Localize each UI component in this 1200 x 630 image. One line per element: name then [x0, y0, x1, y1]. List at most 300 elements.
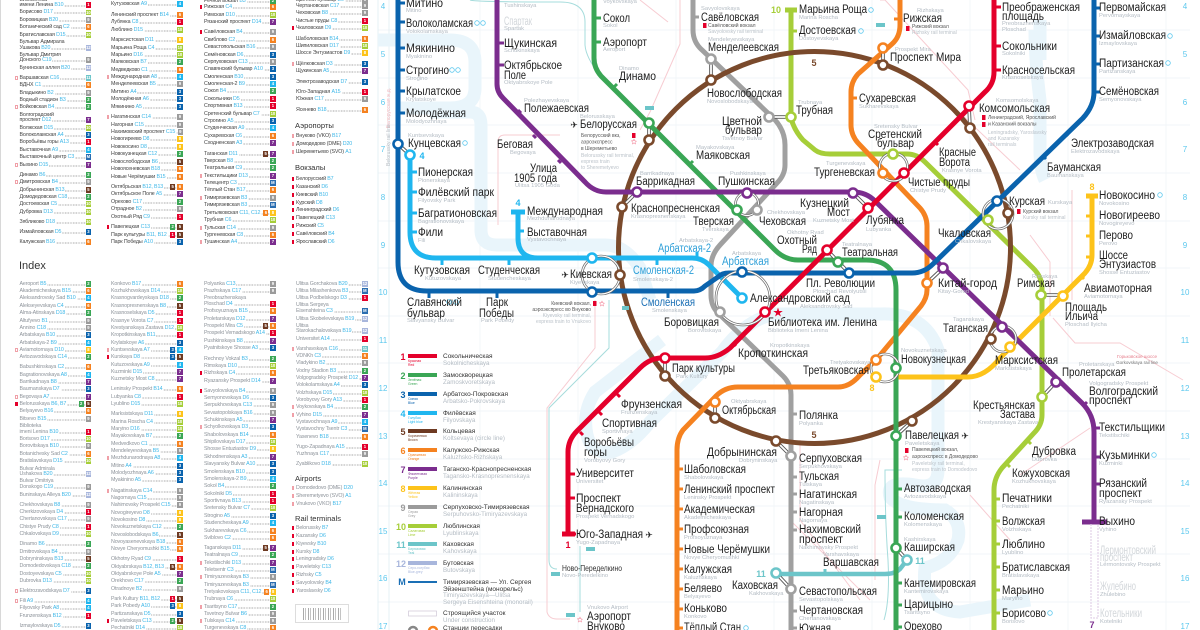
index column 3 Russian: 10 — [271, 217, 275, 222]
index column 3 Latin: Proletarskaya D12 — [204, 316, 245, 322]
index column 1 Russian: Измайловская D5 — [20, 228, 61, 234]
index column 2 Latin: 6 — [179, 539, 181, 544]
station labels west: Molodyozhnaya — [406, 119, 447, 125]
index column 3 Latin: 9 — [272, 410, 274, 415]
station labels north centre: аэроэкспресс — [581, 140, 613, 146]
legend row: line 12: 12 — [396, 559, 406, 569]
station labels south: Kakhovskaya — [749, 591, 784, 597]
station labels west: Студенческая — [478, 265, 540, 277]
index column 3 Latin — [200, 280, 276, 630]
index column 1 Russian: проспект D12 — [20, 116, 51, 122]
station labels north east: Римская — [1017, 278, 1055, 290]
station labels north east — [938, 2, 1166, 328]
station labels north centre: express train — [581, 159, 610, 165]
line 3 dark blue — [398, 0, 1094, 291]
station labels south east: проспект — [1099, 488, 1143, 500]
index column 1 Latin: Biblioteka — [20, 422, 41, 428]
index column 1 Latin: 2 — [87, 354, 90, 359]
line numbers: 5 — [811, 430, 817, 440]
index column 3 Latin: Sokol B4 — [204, 482, 224, 488]
index column 2 Russian: Мякинино A5 — [111, 104, 142, 110]
list: rail terminals: Yaroslavsky D6 — [296, 588, 331, 594]
station labels north centre: Проспект Мира — [890, 52, 962, 64]
index column 3 Russian: Савёловская B4 — [204, 28, 242, 34]
index column 4 Russian: Юго-Западная A15 — [296, 88, 340, 94]
index column 2 Russian: Октябрьская B12, B13 — [111, 184, 163, 190]
station labels centre: Ряд — [802, 244, 817, 256]
legend row: line 7 — [400, 465, 532, 480]
station labels centre: Арбатская-2 — [658, 243, 711, 255]
left page edge — [0, 0, 1, 630]
index column 2 Latin: Park Pobedy A10 — [111, 602, 150, 608]
index column 2 Latin: 10 — [178, 401, 182, 406]
station labels west: Филёвский парк — [418, 187, 495, 199]
index column 2 Latin: Oktyabrskaya B12, B13 — [111, 564, 164, 570]
station labels south east: Братиславская — [1002, 562, 1070, 574]
index column 3 Latin: 6 — [272, 432, 274, 437]
index column 3 Russian: Сокольники D5 — [204, 96, 240, 102]
index column 1 Russian: Донского C19 — [20, 56, 51, 62]
index column 2 Russian: Митино A4 — [111, 88, 136, 94]
airport express lines — [470, 0, 902, 620]
station labels north centre: Rizhskaya — [917, 8, 945, 14]
station labels north east: Baumanskaya — [1047, 173, 1085, 179]
grid numbers left: 8 — [381, 193, 386, 202]
service icons: ✈ — [645, 530, 653, 540]
index column 3 Russian: Текстильщики D13 — [204, 172, 248, 178]
station labels west: Победы — [479, 308, 514, 320]
index column 4 Russian: Шипиловская D17 — [296, 42, 339, 48]
station labels north east: Первомайская — [1099, 2, 1166, 14]
station labels west: Spartak — [504, 26, 524, 32]
station labels north east: Novogireyevo — [1099, 221, 1134, 227]
index column 1 Latin: 12 — [86, 492, 91, 497]
station labels west: Фили — [418, 227, 443, 239]
station labels south: Polyanka — [799, 421, 824, 427]
index column 4 Latin: М — [363, 288, 367, 293]
index column 3 Latin: Shosse Entuziastov D9 — [204, 446, 256, 452]
index column 2 Latin: 6 — [179, 441, 181, 446]
station labels south: Belyayevo — [684, 594, 711, 600]
index column 2 Russian: Охотный Ряд C9 — [111, 214, 150, 220]
index column 1 Russian: Боровицкая B20 — [20, 16, 58, 22]
station labels south: Коньково — [684, 603, 727, 615]
index column 2 Latin: Lyublino D15 — [111, 400, 140, 406]
station labels west: Щукинская — [504, 38, 557, 50]
index column 3 Latin: Preobrazhenskaya — [204, 294, 246, 300]
index column 1 Russian: Дмитровская B4 — [20, 178, 58, 184]
station labels north centre: Chekhovskaya — [767, 210, 806, 216]
index column 3 Russian: Рязанский проспект D14 — [204, 18, 261, 24]
index column 3 Latin: 9 — [272, 618, 274, 623]
index column 3 Latin: 5 — [265, 323, 267, 328]
index column 2 Latin: 3 — [179, 611, 181, 616]
index column 3 Russian: Семёновская D6 — [204, 52, 243, 58]
index column 4 Latin: Voykovskaya B4 — [296, 404, 333, 410]
heading: Index: Index — [19, 260, 46, 272]
station labels west: Pionerskaya — [418, 178, 451, 184]
station labels south east: Выхино — [1099, 516, 1135, 528]
index column 3 Latin: Trubnaya C6 — [204, 596, 233, 602]
station labels south east: Vyhino — [1099, 527, 1117, 533]
station labels north centre: Belorusskaya — [580, 114, 616, 120]
index column 4 Latin: Ulitsa Skobelevskaya B19 — [296, 316, 354, 322]
grid numbers right: 12 — [1181, 384, 1190, 393]
index column 3 Latin: 7 — [272, 417, 274, 422]
index column 3 Russian: Серпуховская C13 — [204, 58, 248, 64]
index column 3 Russian: Севастопольская B16 — [204, 44, 255, 50]
index column 4 Latin: 4 — [364, 419, 366, 424]
index column 3 Latin: 7 — [272, 316, 274, 321]
station labels north east: Авиамоторная — [1084, 283, 1152, 295]
station labels north centre: Tsvetnoy Bulvar — [722, 136, 763, 142]
service icons: ✈ — [961, 431, 969, 441]
index column 3 Russian: М — [271, 180, 275, 185]
station labels south east: Кожуховская — [1012, 468, 1070, 480]
station labels south: Serpukhovskaya — [799, 464, 843, 470]
legend row: line 5: Koltsevaya (circle line) — [443, 435, 505, 442]
station labels north east: Энтузиастов — [1099, 259, 1156, 271]
index column 2 Latin: 7 — [179, 571, 181, 576]
station labels north east: Измайловская — [1099, 30, 1166, 42]
station labels south east: Gorkovskaya rail line — [1116, 360, 1158, 365]
station labels west: Kutuzovskaya — [425, 276, 462, 282]
index column 1 Latin: Akademicheskaya B15 — [20, 288, 71, 294]
index column 4 Russian: 7 — [364, 68, 366, 73]
index column 1 Russian: 4 — [87, 147, 90, 152]
index column 3 Latin: 9 — [272, 611, 274, 616]
station labels north centre: Пушкинская — [718, 176, 775, 188]
index column 2 Latin: 1 — [179, 556, 181, 561]
heading: airports: Airports — [295, 474, 321, 483]
index column 2 Russian: 6 — [179, 174, 181, 179]
index column 1 Russian: 10 — [86, 10, 91, 15]
grid numbers left: 6 — [381, 98, 386, 107]
station labels south east: Коломенская — [904, 511, 964, 523]
index column 3 Latin: Prospekt Vernadskogo A14 — [204, 330, 265, 336]
index column 3 Russian: 10 — [271, 12, 275, 17]
station labels north east: Partizanskaya — [1099, 69, 1136, 75]
index column 3 Latin: 7 — [272, 545, 274, 550]
grid numbers right — [1181, 2, 1190, 630]
legend row: line 4: Light blue — [408, 420, 423, 424]
index column 1 Latin: 2 — [87, 563, 90, 568]
index column 1 Latin: Donskogo C19 — [20, 484, 53, 490]
index column 1 Russian: 3 — [87, 132, 90, 137]
grid numbers left: 4 — [381, 2, 386, 11]
station labels north east: Электрозаводская — [1071, 138, 1154, 150]
station labels south: Universitet — [576, 479, 604, 485]
station labels west: Молодёжная — [406, 108, 466, 120]
list: rail terminals: Savyolovsky B4 — [296, 580, 332, 586]
legend row: line 3 — [400, 390, 508, 405]
index column 1 Latin: 9 — [87, 484, 90, 489]
index column 1 Latin: 5 — [87, 401, 90, 406]
station labels north east: Sokolniki — [1002, 51, 1025, 57]
index column 2 Latin: 7 — [179, 376, 181, 381]
index column 2 Latin: 1 — [179, 332, 181, 337]
index column 2 Latin: 6 — [179, 386, 181, 391]
station labels north centre: Sretensky Bulvar — [874, 124, 918, 130]
line numbers: 8 — [1089, 182, 1095, 192]
index column 2 Latin: 8 — [179, 603, 181, 608]
station labels north east: and Kazansky — [988, 136, 1020, 142]
station labels south east: Kolomenskaya — [904, 522, 943, 528]
station labels north centre: Достоевская — [799, 25, 856, 37]
legend row: line 3: 3 — [400, 390, 406, 400]
index column 4 Russian: Чеховская B8 — [296, 10, 328, 16]
index column 2 Latin: Konkovo B17 — [111, 280, 141, 286]
index column 2 Latin: 3 — [172, 603, 174, 608]
station labels north centre — [580, 0, 982, 233]
index column 2 Russian: Новоясеневская B18 — [111, 166, 160, 172]
index column 3 Russian: 1 — [272, 103, 274, 108]
grid numbers right: 9 — [1183, 241, 1188, 250]
legend row: monorail — [398, 577, 533, 606]
index column 1 Russian: М — [87, 154, 90, 159]
interchange rings — [582, 153, 1016, 382]
list: rail terminals Russian: Ярославский D6 — [296, 238, 334, 244]
station labels north east: rail terminals — [988, 142, 1017, 148]
index column 3 Russian: 1 — [272, 96, 274, 101]
index column 2 Latin: Krylatskoye A6 — [111, 340, 144, 346]
line 8 yellow — [896, 196, 1098, 377]
grid numbers right: 10 — [1181, 288, 1190, 297]
index column 2 Russian: Парк культуры B11, B12 — [111, 232, 167, 238]
station labels centre: Ploschad Revolyutsii — [813, 289, 866, 295]
station labels south: Нагатинская — [799, 489, 857, 501]
index column 2 Russian: 6 — [179, 184, 181, 189]
grid numbers right: 7 — [1183, 145, 1188, 154]
index column 1 Russian: Добрынинская B13 — [20, 186, 64, 192]
index column 4 Russian: Электрозаводская D7 — [296, 78, 347, 84]
station labels north east: Pervomayskaya — [1099, 13, 1141, 19]
station labels north centre: Рижская — [903, 13, 942, 25]
index column 1 Latin: 10 — [86, 571, 91, 576]
station labels south: Севастопольская — [799, 586, 877, 598]
index column 3 Latin: Rizhskaya C4 — [204, 370, 235, 376]
index column 4 Russian: Чертановская C17 — [296, 2, 339, 8]
station labels north centre: Trubnaya — [798, 100, 823, 106]
station labels south: Аэропорт — [587, 611, 632, 623]
station labels south: Chertanovskaya — [799, 616, 842, 622]
station labels north centre: Dostoyevskaya — [799, 36, 839, 42]
index column 2 Russian: Новогиреево D8 — [111, 136, 149, 142]
station labels north centre: Savyolovskaya — [701, 6, 740, 12]
station labels north centre: Чистые пруды — [908, 177, 970, 189]
station labels west: Myakinino — [406, 54, 432, 60]
legend row: line 12: Серо-голубая — [408, 566, 430, 570]
index column 1 Latin: Babushkinskaya C2 — [20, 364, 64, 370]
index column 2 Russian: 4 — [179, 74, 181, 79]
index column 2 Latin: 6 — [179, 546, 181, 551]
index column 2 Russian: 6 — [179, 67, 181, 72]
list: rail terminals: Leningradsky D6 — [296, 556, 334, 562]
index column 2 Russian: 9 — [179, 122, 181, 127]
station labels south east: Рязанский — [1099, 478, 1147, 490]
index column 1 Latin: Chertanovskaya C17 — [20, 516, 67, 522]
index column 1 Latin: 2 — [80, 401, 82, 406]
station labels south: Добрынинская — [707, 447, 777, 459]
index column 1 Latin: Altufyevo B1 — [20, 318, 48, 324]
station labels south: Dobryninskaya — [739, 458, 778, 464]
station labels south: Vorobyovy Gory — [584, 458, 625, 464]
station labels west: Октябрьское — [504, 60, 562, 72]
index column 2 Russian: 10 — [178, 45, 182, 50]
index column 1 Russian: 6 — [87, 24, 90, 29]
line numbers: 7 — [1089, 620, 1095, 630]
index column 2 Latin: Orekhovo C17 — [111, 578, 144, 584]
list: airports: Domodedovo (DME) D20 — [296, 484, 353, 490]
index column 3 Latin: 6 — [272, 528, 274, 533]
list: rail terminals: Belorussky B7 — [296, 524, 328, 530]
station labels south east: Kantemirovskaya — [904, 589, 949, 595]
index column 3 Russian: Тимирязевская B3 — [204, 194, 247, 200]
index column 1 Latin: 3 — [87, 588, 90, 593]
index column 2 Russian: 9 — [179, 114, 181, 119]
index column 2 Latin: 3 — [172, 347, 174, 352]
index column 2 Russian: Люблино D15 — [111, 26, 143, 32]
station labels centre: Proletarskaya — [1079, 362, 1115, 368]
station labels north east: Сокольники — [1002, 41, 1057, 53]
legend row: monorail: Тимирязевская — Ул. Сергея — [443, 579, 532, 586]
station labels west: Filyovsky Park — [418, 198, 455, 204]
index column 1 Latin: 10 — [86, 436, 91, 441]
station labels north east: Chkalovskaya — [955, 239, 992, 245]
station labels centre: Арбатская — [722, 256, 769, 268]
station labels north centre: бульвар — [725, 125, 762, 137]
index column 2 Russian: Международная A8 — [111, 74, 157, 80]
index column 3 Latin: 5 — [265, 545, 267, 550]
station labels west: Begovaya — [510, 150, 537, 156]
index column 3 Latin: 9 — [272, 388, 274, 393]
index column 2 Latin: Nagornaya C15 — [111, 494, 146, 500]
index column 1 Russian: 6 — [87, 239, 90, 244]
station labels centre: Мост — [827, 207, 851, 219]
legend row: line 2: Green — [408, 382, 418, 386]
index column 3 Russian: Телецентр C3 — [204, 180, 237, 186]
legend row: line 12: Blue-grey — [408, 570, 423, 574]
legend row: line 2 — [400, 371, 495, 386]
station labels centre: Парк культуры — [672, 363, 735, 375]
index column 3 Latin: 2 — [272, 483, 274, 488]
index column 2 Latin: 3 — [179, 340, 181, 345]
rail line captions: Белорусская ж.д. — [386, 88, 392, 128]
legend row: line 4: Голубая — [408, 416, 421, 420]
index column 1 Russian: Зябликово D18 — [20, 218, 55, 224]
line numbers: 4 — [419, 151, 425, 161]
index column 1 Latin: 4 — [87, 340, 90, 345]
index column 3 Russian: 3 — [272, 66, 274, 71]
list: rail terminals Russian — [292, 176, 340, 244]
station labels north east: Semyonovskaya — [1099, 97, 1142, 103]
list: rail terminals Russian: Белорусский B7 — [296, 176, 334, 182]
service icons: ★ — [773, 308, 783, 319]
index column 3 Russian: Тёплый Стан B17 — [204, 186, 245, 192]
line 10 lime — [785, 10, 1042, 630]
station labels south: Konkovo — [684, 614, 707, 620]
index column 3 Latin: Sportivnaya B13 — [204, 498, 241, 504]
station labels south east: Кузьминки — [1099, 450, 1150, 462]
station labels south east: Kashirskaya — [904, 537, 936, 543]
station labels north centre: Цветной — [722, 116, 762, 128]
list: rail terminals: Paveletsky C13 — [296, 564, 331, 570]
index column 2 Latin: 8 — [179, 517, 181, 522]
legend row: line 12: Butovskaya — [443, 567, 476, 574]
index column 4 Latin: М — [363, 308, 367, 313]
index column 2 Latin: 5 — [179, 303, 181, 308]
legend row: line 10 — [396, 522, 480, 537]
index column 2 Russian: Нахимовский проспект C15 — [111, 128, 175, 134]
station labels north east: Ploschad — [1002, 27, 1026, 33]
index column 3 Russian: 8 — [272, 210, 274, 215]
legend row: line 8: Kalininskaya — [443, 492, 478, 499]
index column 2 Latin: Mitino A4 — [111, 462, 132, 468]
index column 4 Russian: Ясенево B18 — [296, 106, 326, 112]
station labels south east: Дубровка — [1032, 446, 1077, 458]
station labels north east: Shosse Entuziastov — [1099, 270, 1150, 276]
index column 2 Russian: 8 — [179, 136, 181, 141]
grid numbers right: 11 — [1181, 336, 1190, 345]
station labels north centre: Sukharevskaya — [859, 104, 899, 110]
index column 2 Latin: 1 — [179, 318, 181, 323]
list: airports: Vnukovo (VKO) B17 — [296, 500, 342, 506]
station labels south east: Печатники — [1002, 493, 1052, 505]
station labels north centre: Prospekt Mira — [895, 47, 932, 53]
index column 4 Latin: 11 — [363, 346, 367, 351]
index column 4 Russian: 6 — [364, 36, 366, 41]
legend row: line 12 — [396, 559, 476, 574]
index column 4 Latin: 10 — [363, 390, 367, 395]
index column 2 Russian: Новые Черёмушки B15 — [111, 174, 166, 180]
index column 3 Russian: Римская D10 — [204, 12, 235, 18]
index column 4 Russian: Шаболовская B14 — [296, 36, 338, 42]
index column 4 Latin: Ulitsa Podbelskogo D3 — [296, 294, 347, 300]
station labels south east: Кантемировская — [904, 578, 976, 590]
index column 1 Russian: 2 — [87, 104, 90, 109]
index column 1 Russian: Варшавская C16 — [20, 74, 59, 80]
index column 2 Latin: 5 — [172, 564, 174, 569]
index column 2 Russian: 3 — [179, 104, 181, 109]
heading: rail terminals: Rail terminals — [295, 514, 341, 523]
station labels centre: Smolenskaya — [652, 308, 688, 314]
station labels north centre: Аэропорт — [603, 37, 648, 49]
list: rail terminals Russian: Казанский D6 — [296, 184, 328, 190]
index column 3 Latin: 8 — [272, 589, 274, 594]
index column 3 Russian: Сходненская A3 — [204, 140, 242, 146]
index column 2 Russian: Медведково C1 — [111, 66, 148, 72]
index column 1 Russian: 7 — [87, 162, 90, 167]
station labels west: Крылатское — [406, 86, 461, 98]
station labels west: Mezhdunarodnaya — [527, 216, 576, 222]
index column 3 Latin: Polyanka C13 — [204, 280, 235, 286]
legend row: under construction — [408, 609, 506, 624]
legend row: line 6: Оранжевая — [408, 453, 426, 457]
station labels south: Фрунзенская — [621, 399, 682, 411]
index column 2 Russian: Нагорная C15 — [111, 122, 144, 128]
station labels centre: Кузнецкий — [800, 198, 849, 210]
station labels north east: Rimskaya — [1032, 274, 1058, 280]
index column 2 Latin: Medvedkovo C1 — [111, 440, 148, 446]
service icons: ✈ — [570, 120, 578, 130]
legend row: line 6: Калужско-Рижская — [443, 447, 500, 454]
legend row: line 8 — [400, 484, 482, 499]
legend row: line 10: Салатовая — [408, 529, 425, 533]
index column 4 Latin: 7 — [364, 412, 366, 417]
station labels centre: Охотный — [777, 235, 817, 247]
station labels west: Мякинино — [406, 43, 455, 55]
station labels south east: Tekstilschiki — [1099, 433, 1130, 439]
